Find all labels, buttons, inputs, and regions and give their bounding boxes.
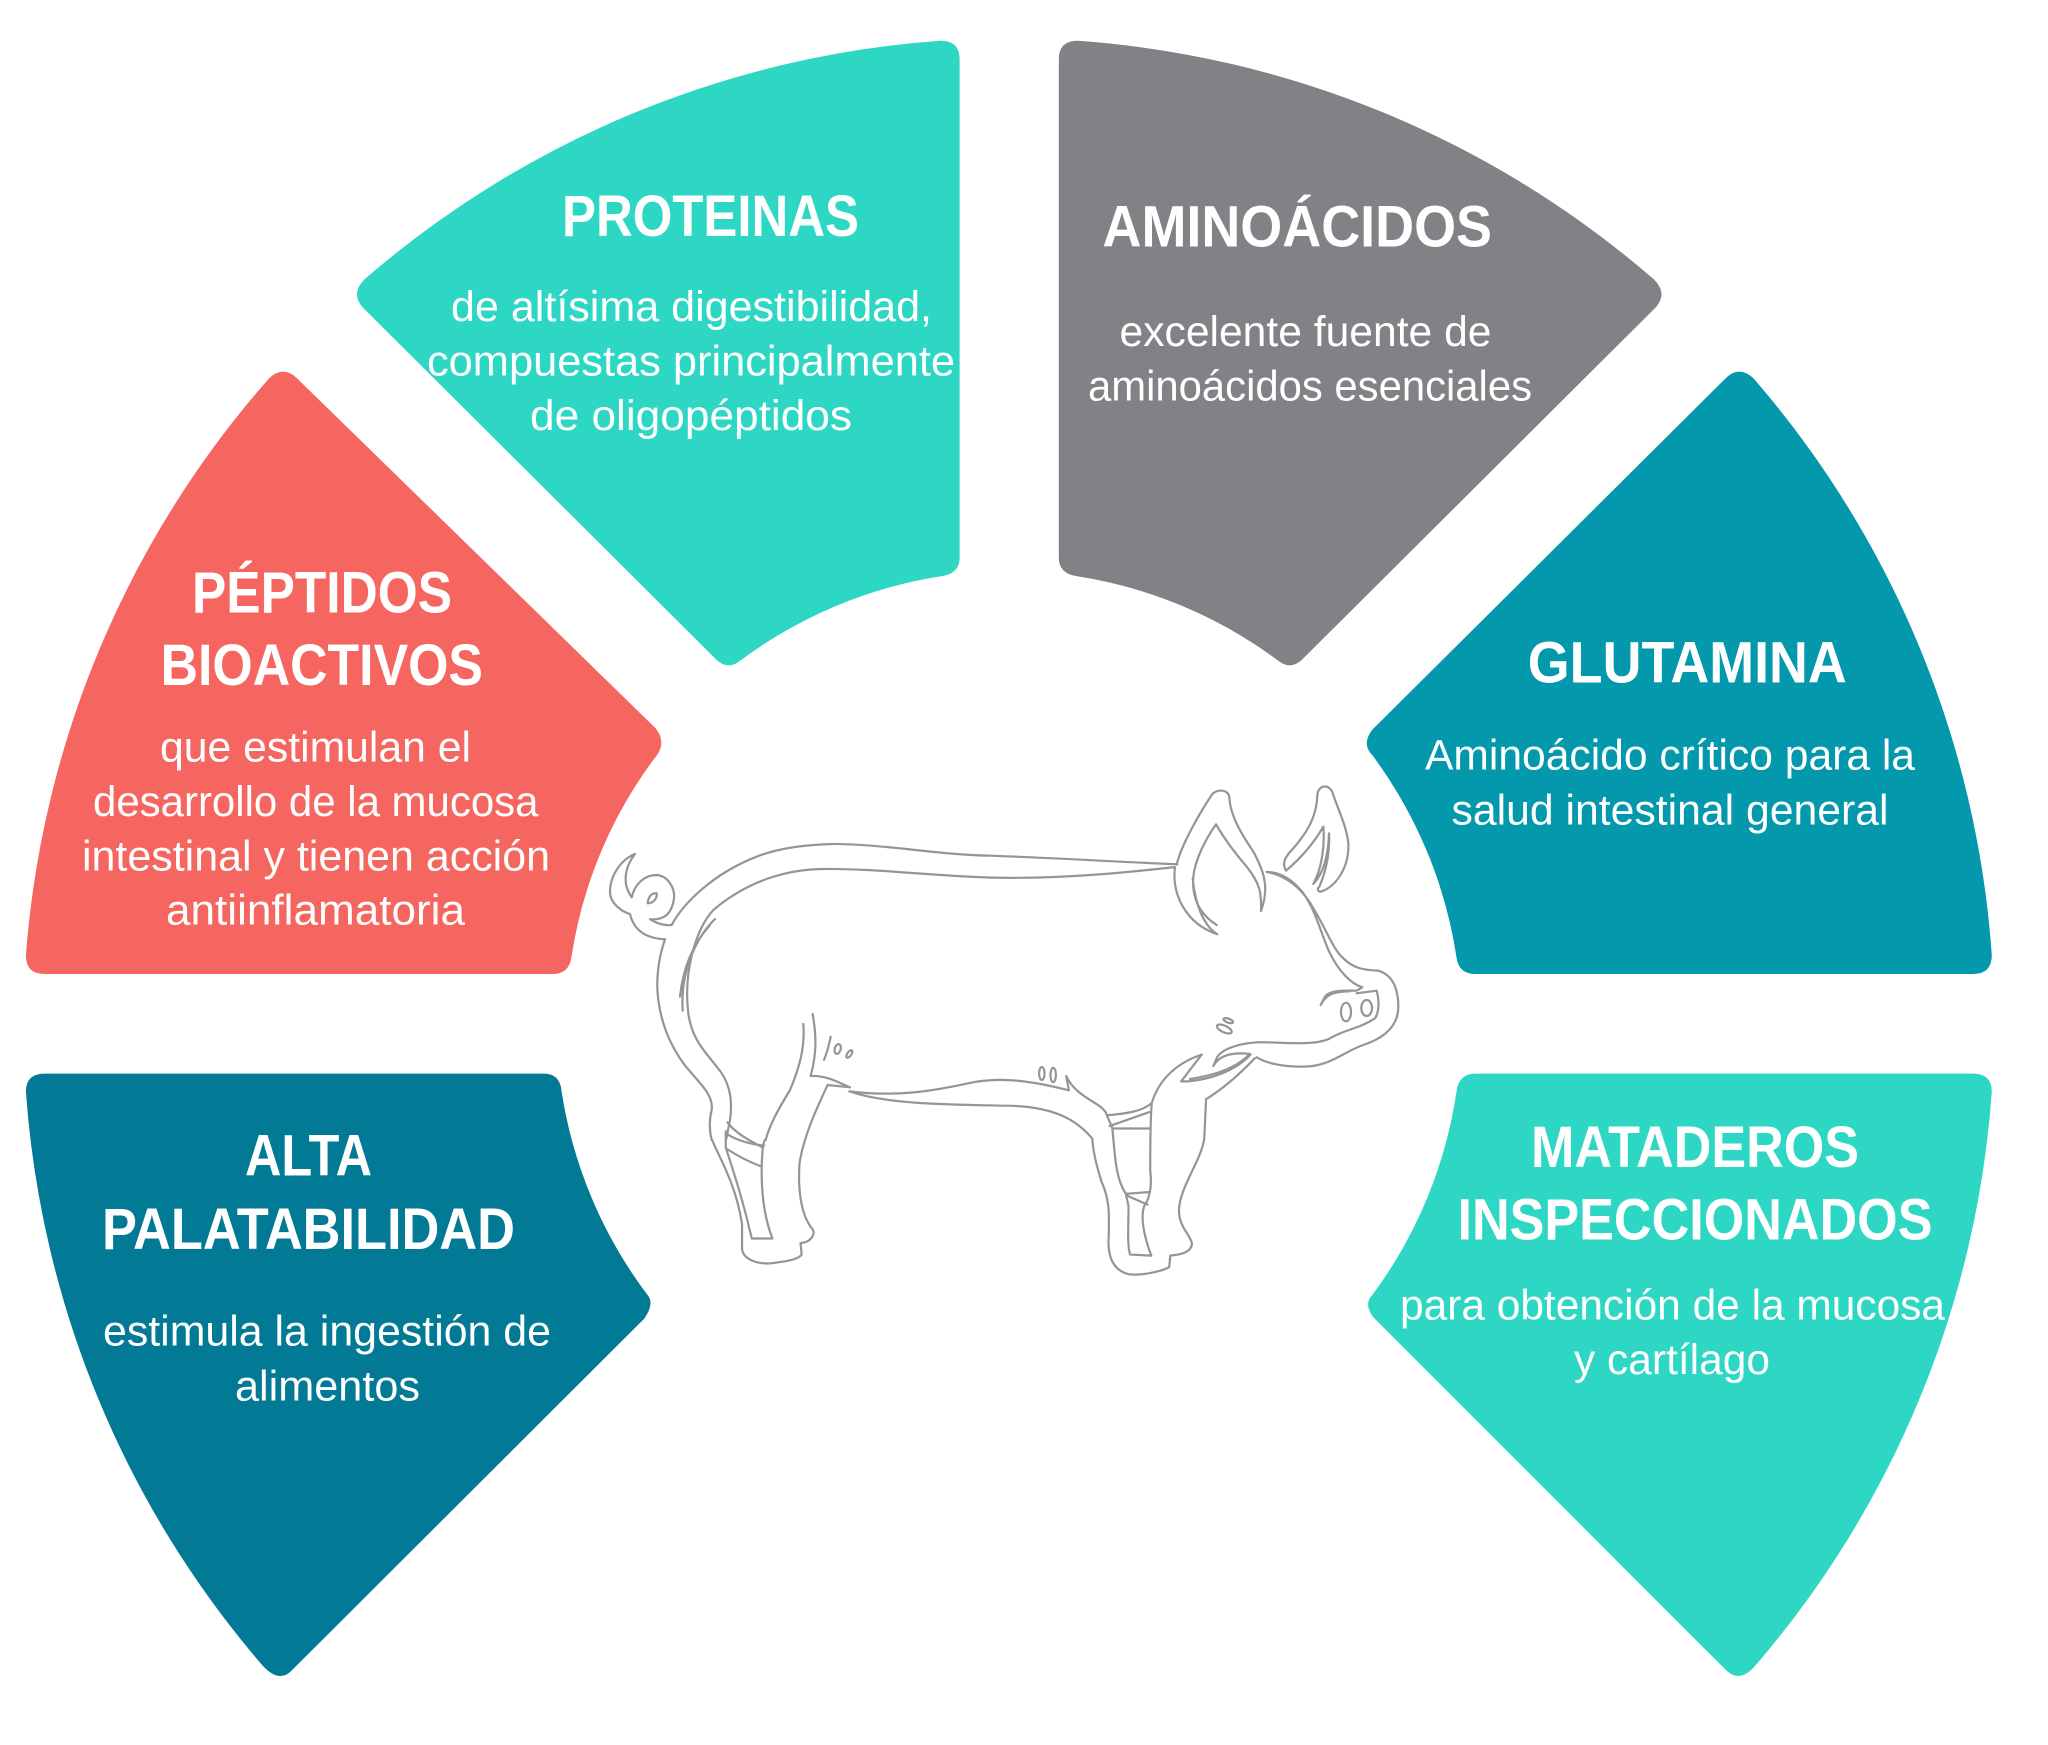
panel: mataderos inspeccionados [1368, 1074, 1992, 1676]
segment shape: glutamina [1367, 372, 1992, 974]
text block: proteinas description: compuestas principalmente [427, 338, 955, 386]
heading: aminoacidos: AMINOÁCIDOS [1102, 194, 1492, 260]
text block: proteinas description: de altísima digestibilidad, [451, 283, 932, 331]
pig flank spots [833, 1043, 853, 1059]
panel: aminoacidos [1059, 41, 1661, 665]
text block: mataderos description [1400, 1282, 1945, 1384]
panel: proteinas [357, 41, 960, 665]
pig ear left [1175, 791, 1265, 934]
text block: glutamina description [1425, 732, 1915, 835]
heading: mataderos inspeccionados: MATADEROS [1531, 1115, 1859, 1180]
heading: mataderos inspeccionados: INSPECCIONADOS [1458, 1188, 1932, 1253]
pig nostrils and eye [1216, 1000, 1372, 1035]
panel: glutamina [1367, 372, 1992, 974]
pig back [828, 844, 1177, 878]
heading: glutamina: GLUTAMINA [1528, 631, 1847, 696]
text block: peptidos description: intestinal y tienen acción [82, 832, 550, 880]
heading: peptidos bioactivos [161, 559, 483, 698]
pig rump contours [657, 844, 833, 1140]
text block: peptidos description: que estimulan el [160, 723, 471, 771]
text block: peptidos description: desarrollo de la mucosa [93, 778, 539, 826]
text block: mataderos description: y cartílago [1574, 1336, 1770, 1384]
text block: peptidos description: antiinflamatoria [166, 887, 465, 935]
text block: proteinas description: de oligopéptidos [530, 392, 852, 440]
pig front leg [1092, 1055, 1255, 1275]
heading: alta palatabilidad: PALATABILIDAD [102, 1197, 515, 1262]
text block: mataderos description: para obtención de la mucosa [1400, 1282, 1945, 1330]
text block: alta palatabilidad description [103, 1308, 551, 1410]
heading: alta palatabilidad [102, 1124, 515, 1262]
panel: peptidos bioactivos [26, 372, 661, 974]
text block: alta palatabilidad description: alimentos [235, 1362, 420, 1410]
text block: aminoacidos description: excelente fuente de [1120, 308, 1492, 356]
text block: glutamina description: salud intestinal general [1452, 787, 1888, 835]
segment shape: peptidos bioactivos [26, 372, 661, 974]
pig hind leg [712, 1085, 828, 1264]
heading: peptidos bioactivos: PÉPTIDOS [192, 559, 452, 625]
heading: mataderos inspeccionados [1458, 1115, 1932, 1253]
segment shape: mataderos inspeccionados [1368, 1074, 1992, 1676]
text block: alta palatabilidad description: estimula la ingestión de [103, 1308, 551, 1356]
text block: proteinas description [427, 283, 955, 440]
pig hind leg top and flank marks [766, 1014, 850, 1140]
segment shape: alta palatabilidad [26, 1074, 651, 1676]
pig head and snout [1190, 872, 1398, 1079]
segment shape: aminoacidos [1059, 41, 1661, 665]
heading: peptidos bioactivos: BIOACTIVOS [161, 633, 483, 698]
heading: alta palatabilidad: ALTA [245, 1124, 372, 1188]
text block: glutamina description: Aminoácido crítico para la [1425, 732, 1915, 780]
pig belly spots [1039, 1067, 1056, 1082]
text block: aminoacidos description: aminoácidos esenciales [1088, 363, 1532, 411]
pig tail [610, 854, 674, 939]
heading: proteinas: PROTEINAS [562, 184, 859, 249]
icon: pig line drawing [610, 786, 1398, 1275]
text block: peptidos description [82, 723, 550, 935]
segment shape: proteinas [357, 41, 960, 665]
panel: alta palatabilidad [26, 1074, 651, 1676]
pig belly [849, 1076, 1112, 1139]
text block: aminoacidos description [1088, 308, 1532, 411]
pig ear right [1284, 786, 1348, 892]
